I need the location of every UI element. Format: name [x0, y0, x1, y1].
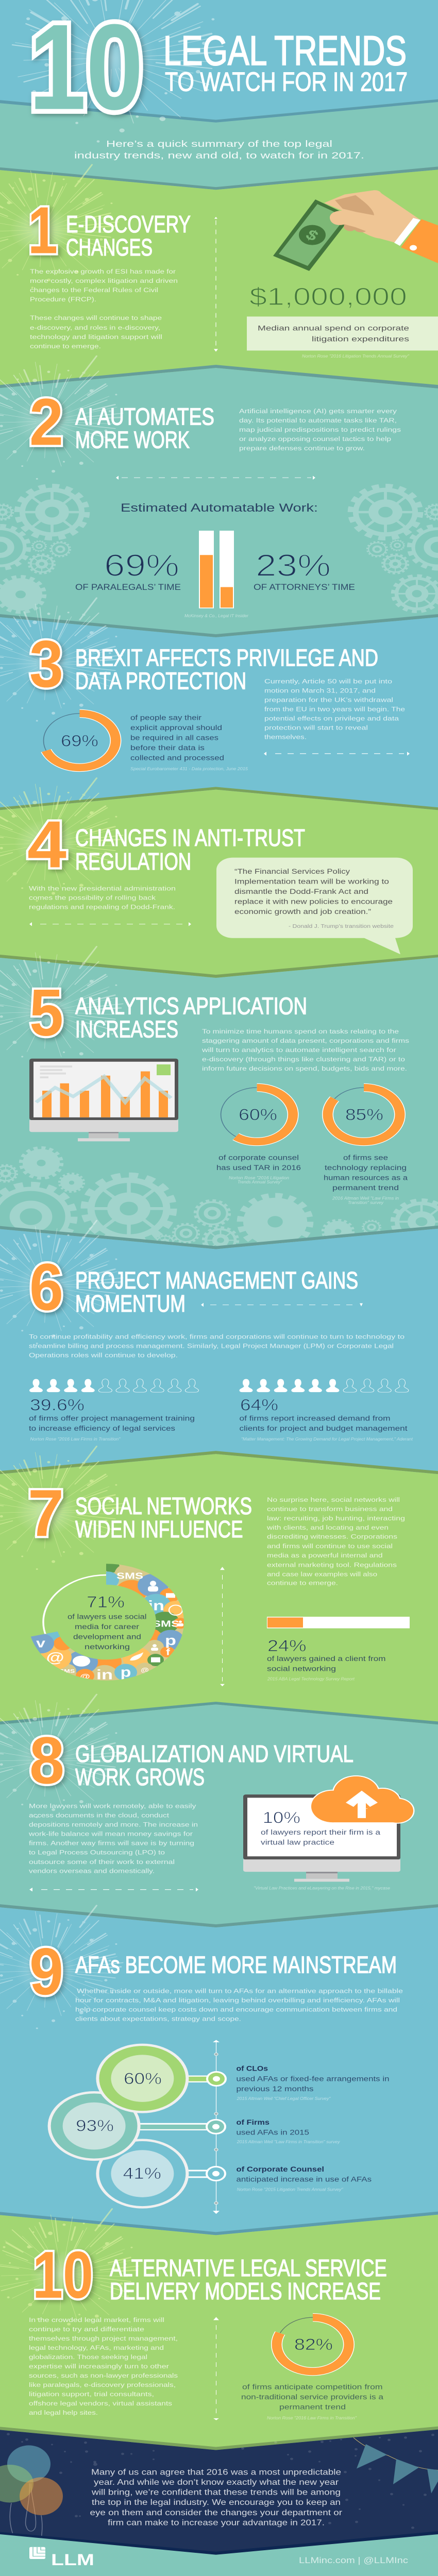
body text: Procedure (FRCP).	[30, 296, 96, 303]
caption	[241, 2383, 384, 2420]
body text: No surprise here, social networks will	[267, 1496, 400, 1503]
panel: footer	[0, 2531, 438, 2576]
arrow: horizontal dashed	[201, 1303, 363, 1307]
gears	[0, 486, 438, 612]
number 5: 5	[29, 975, 63, 1050]
stat: paralegals: 69%	[104, 548, 179, 583]
body text: from the EU in two years will begin. The	[264, 705, 405, 713]
icon: cloud upload	[311, 1776, 413, 1823]
icon: hand holding money: $	[302, 226, 322, 244]
body text: continue to emerge.	[30, 343, 101, 349]
body text: prepare defenses continue to grow.	[239, 445, 365, 452]
donut chart: 60%: 60%	[239, 1105, 277, 1124]
body text: outsource some of their work to external	[29, 1858, 175, 1865]
body text: continue to try and differentiate	[29, 2326, 144, 2333]
caption: corporate counsel: Norton Rose "2016 Litigation	[229, 1176, 289, 1180]
body text: depositions remotely and more. The increase in	[29, 1821, 198, 1828]
body text: help corporate counsel keep costs down and encourage communication between firms and	[75, 2006, 397, 2013]
body text: themselves through project management,	[29, 2335, 178, 2342]
social ring chart: 71%: in	[148, 1598, 164, 1613]
donut chart: 69%: 69%	[61, 732, 98, 750]
timeline	[213, 2040, 220, 2214]
arrow: horizontal dashed	[264, 752, 410, 756]
body text	[29, 1333, 405, 1359]
body text: The explosive growth of ESI has made for	[30, 268, 176, 275]
gears	[0, 1148, 438, 1253]
body text: preparation for the UK’s withdrawal	[264, 696, 393, 703]
social ring chart: 71%: p	[165, 1632, 176, 1648]
number 1: 1	[28, 193, 58, 267]
heading	[75, 1740, 353, 1790]
source: "Virtual Law Practices and eLawyering on the Rise in 2015," mycase	[254, 1886, 390, 1890]
body text: with clients, and locating and even	[266, 1524, 389, 1531]
speech bubble: quote: dismantle the Dodd-Frank Act and	[234, 888, 368, 896]
bubble: 41%	[97, 2140, 225, 2207]
caption: corporate counsel	[216, 1154, 301, 1184]
body text: With the new presidential administration	[29, 885, 176, 892]
label: of CLOs: used AFAs or fixed-fee arrangements in	[236, 2075, 390, 2083]
stat: 39.6%: of firms offer project management training	[29, 1415, 195, 1422]
bubble: 60%: 60%	[124, 2069, 162, 2088]
heading: DATA PROTECTION	[75, 667, 246, 694]
number 9: 9	[29, 1935, 63, 2009]
label: of Corporate Counsel: of Corporate Counsel	[236, 2165, 324, 2173]
label: of Firms: 2015 Altman Weil "Law Firms in Transition" survey	[237, 2140, 341, 2144]
panel: 5 analytics	[0, 946, 438, 1253]
body text: discrediting witnesses. Corporations	[267, 1533, 397, 1540]
icon: hand holding money	[273, 190, 438, 271]
stat text: explicit approval should	[130, 724, 222, 732]
pictogram: 39.6% of firms	[29, 1379, 198, 1392]
body text: Operations roles will continue to develop.	[29, 1352, 178, 1359]
speech bubble: quote: - Donald J. Trump’s transition website	[289, 923, 394, 929]
heading	[75, 644, 378, 694]
arrow: vertical dashed	[213, 2317, 219, 2420]
arrow: vertical dashed	[214, 217, 218, 352]
body text: regulations and repealing of Dodd-Frank.	[29, 903, 175, 910]
social ring chart: 71%: media for career	[75, 1623, 140, 1631]
heading: INCREASES	[75, 1015, 178, 1043]
stat: 24%: social networking	[267, 1665, 336, 1673]
stat: 39.6%: 39.6%	[30, 1396, 85, 1414]
heading: E-DISCOVERY	[66, 210, 191, 238]
social ring chart: 71%: @	[141, 1666, 149, 1673]
body text: potential effects on privilege and data	[264, 715, 399, 722]
body text	[75, 1988, 403, 2022]
body text: To continue profitability and efficiency work, firms and corporations will continue to turn to technology to	[29, 1333, 405, 1340]
callout: median annual spend: litigation expenditures	[312, 335, 409, 343]
caption: firms: Transition" survey	[348, 1200, 384, 1205]
closing text: year. And while we don’t know exactly what the new year	[94, 2478, 339, 2486]
body text: clients about expectations, strategy and scope.	[75, 2015, 241, 2022]
social ring chart: 71%: @	[80, 1672, 90, 1681]
callout: median annual spend: Median annual spend on corporate	[258, 324, 409, 332]
number 7: 7	[28, 1476, 64, 1550]
body text: map judicial predispositions to predict rulings	[239, 426, 401, 433]
panel: intro	[0, 97, 438, 193]
social ring chart: 71%: of lawyers use social	[68, 1613, 146, 1621]
bubble: 93%	[49, 2092, 225, 2160]
pictogram: 64% of firms	[239, 1379, 409, 1392]
social ring chart: 71%: @	[46, 1649, 64, 1665]
bar chart: 24%	[267, 1617, 410, 1629]
stat: 39.6%: Norton Rose "2016 Law Firms in Transition"	[30, 1437, 121, 1442]
speech bubble: quote: economic growth and job creation.”	[234, 908, 371, 916]
label: of CLOs: 2015 Altman Weil "Chief Legal Officer Survey"	[237, 2096, 331, 2100]
bubble: 60%	[97, 2045, 226, 2112]
social ring chart: 71%: f	[166, 1647, 171, 1657]
stat: 24%: 2015 ABA Legal Technology Survey Report	[267, 1677, 355, 1681]
speech bubble: quote	[216, 858, 413, 954]
logo: LLM	[29, 2547, 94, 2569]
label: of Corporate Counsel: anticipated increase in use of AFAs	[236, 2176, 372, 2183]
body text: comes the possibility of rolling back	[29, 894, 156, 901]
heading: CHANGES	[66, 233, 153, 261]
body text: or analyze opposing counsel tactics to help	[239, 435, 391, 443]
stat text	[130, 714, 224, 762]
speech bubble: quote: “The Financial Services Policy	[234, 868, 350, 876]
number 6: 6	[29, 1250, 63, 1324]
label: of CLOs: of CLOs	[236, 2064, 268, 2073]
social ring chart: 71%: in	[96, 1667, 113, 1683]
body text: hour for contracts, M&A and litigation, leaving behind overbilling and inefficiency. AFAs will	[75, 1997, 400, 2004]
stat: $1,000,000: $1,000,000	[249, 283, 407, 310]
confetti dots	[7, 2433, 434, 2529]
stat text: be required in all cases	[130, 734, 218, 742]
heading: WIDEN INFLUENCE	[75, 1516, 243, 1543]
firework: 4	[0, 778, 123, 902]
callout: median annual spend	[247, 316, 438, 350]
heading	[75, 403, 214, 453]
body text: work-life balance will mean money savings for	[28, 1830, 193, 1837]
caption: non-traditional service providers is a	[241, 2393, 384, 2401]
body text: and case law examples will also	[267, 1570, 377, 1578]
body text: and legal help sites.	[29, 2409, 98, 2416]
firework: 2	[0, 356, 123, 480]
intro text	[74, 139, 364, 161]
heading	[110, 2254, 387, 2304]
heading: WORK GROWS	[75, 1763, 205, 1790]
number 4: 4	[27, 807, 66, 882]
caption: of firms anticipate competition from	[242, 2383, 382, 2391]
caption: corporate counsel: has used TAR in 2016	[216, 1164, 301, 1172]
body text	[239, 408, 401, 452]
title	[163, 28, 408, 96]
firework: 5	[0, 946, 123, 1070]
arrow: vertical dashed	[220, 1567, 225, 1686]
body text: staggering amount of data present, corporations and firms	[202, 1037, 409, 1044]
label: of Corporate Counsel	[236, 2165, 372, 2192]
firework: 10	[0, 2209, 139, 2332]
caption: corporate counsel: of corporate counsel	[218, 1154, 299, 1162]
body text: To minimize time humans spend on tasks relating to the	[202, 1028, 399, 1035]
closing text	[90, 2468, 342, 2527]
body text	[264, 677, 405, 740]
heading	[75, 992, 307, 1043]
body text: sources, such as non-lawyer professionals	[29, 2372, 178, 2379]
body text: Whether inside or outside, more will turn to AFAs for an alternative approach to the billable	[77, 1988, 403, 1994]
social ring chart: 71%: development and	[73, 1633, 141, 1641]
logo: LLM: LLM	[51, 2550, 94, 2569]
social ring chart: 71%: p	[121, 1665, 131, 1680]
source: McKinsey & Co., Legal IT Insider	[184, 614, 249, 618]
body text: will turn to analytics to automate intelligent search for	[201, 1046, 396, 1054]
bar chart: automatable work	[199, 531, 234, 608]
intro text: industry trends, new and old, to watch for in 2017.	[74, 150, 364, 161]
panel: 1 e-discovery changes	[0, 165, 438, 391]
caption: firms: human resources as a	[324, 1174, 408, 1182]
social ring chart: 71%: 71%	[87, 1592, 125, 1611]
stat: attorneys: 23%	[256, 548, 331, 583]
speech bubble: quote: replace it with new policies to encourage	[234, 898, 393, 906]
stat: paralegals	[75, 548, 181, 592]
social ring chart: 71%: v	[36, 1636, 45, 1650]
stat: 24%	[267, 1636, 385, 1681]
panel: header	[0, 0, 438, 143]
firework: 6	[0, 1221, 123, 1344]
body text: motion on March 31, 2017, and	[264, 687, 376, 694]
body text: continue to emerge.	[267, 1579, 338, 1586]
body text: external marketing tool. Regulations	[267, 1561, 397, 1568]
number 8: 8	[29, 1723, 64, 1798]
panel: 2 AI automates more work	[0, 356, 438, 641]
stat: 39.6%	[29, 1396, 195, 1442]
label: of CLOs	[236, 2064, 390, 2100]
stat: 24%: 24%	[267, 1636, 307, 1655]
closing text: eye on them and consider the changes your department or	[90, 2508, 342, 2517]
body text	[29, 885, 176, 910]
donut chart: 69%	[43, 714, 115, 768]
label: of CLOs: previous 12 months	[236, 2085, 313, 2093]
intro text: Here’s a quick summary of the top legal	[106, 139, 332, 149]
social ring chart: 71%: SMS	[116, 1571, 143, 1581]
body text: vendors overseas and domestically.	[29, 1867, 155, 1874]
caption: firms	[324, 1154, 408, 1205]
stat: paralegals: OF PARALEGALS’ TIME	[75, 582, 181, 592]
closing text: the top in the legal industry. We encourage you to keep an	[92, 2498, 341, 2506]
body text: and firms will continue to use social	[267, 1543, 393, 1550]
big number 10: 10	[29, 0, 143, 135]
heading: MOMENTUM	[75, 1290, 186, 1317]
stat: 24%: of lawyers gained a client from	[267, 1655, 386, 1663]
stat: attorneys: OF ATTORNEYS’ TIME	[254, 582, 355, 592]
donut chart: 85%	[328, 1088, 400, 1142]
arrow: horizontal dashed	[29, 1888, 198, 1891]
body text: to Legal Process Outsourcing (LPO) to	[29, 1849, 165, 1856]
body text: e-discovery, and roles in e-discovery,	[30, 324, 160, 331]
arrow: horizontal dashed	[116, 476, 315, 480]
closing text: firm can make to increase your advantage in 2017.	[108, 2518, 325, 2527]
caption: Norton Rose "2016 Law Firms in Transition"	[267, 2416, 357, 2420]
stat: 64%: of firms report increased demand from	[239, 1415, 390, 1422]
panel: closing	[0, 2427, 438, 2556]
donut chart: 82%	[277, 2317, 349, 2371]
bubble: 41%: 41%	[123, 2164, 161, 2182]
label: of Corporate Counsel: Norton Rose "2015 Litigation Trends Annual Survey"	[237, 2188, 343, 2192]
body text: globalization. Those seeking legal	[29, 2353, 147, 2361]
social ring chart: 71%	[31, 1564, 184, 1681]
body text: offshore legal vendors, virtual assistants	[29, 2400, 172, 2407]
body text	[201, 1028, 409, 1072]
heading	[75, 1267, 358, 1317]
firework: 7	[0, 1446, 123, 1570]
closing text: Many of us can agree that 2016 was a most unpredictable	[91, 2468, 341, 2477]
stat: 64%: 64%	[240, 1396, 278, 1414]
closing text: will bring, we’re confident that these trends will be among	[91, 2488, 341, 2497]
icon: monitor with cloud: virtual law practice	[261, 1839, 334, 1846]
speech bubble: quote: Implementation team will be working to	[234, 878, 389, 886]
body text: more costly, complex litigation and driven	[30, 277, 178, 284]
panel: 3 brexit	[0, 598, 438, 811]
body text: continue to transform business and	[267, 1505, 393, 1513]
body text: expertise will increasingly turn to other	[29, 2363, 169, 2370]
stat text: of people say their	[130, 714, 202, 722]
heading: REGULATION	[75, 848, 191, 875]
body text: In the crowded legal market, firms will	[29, 2316, 164, 2324]
caption: firms: technology replacing	[325, 1164, 407, 1172]
source: Norton Rose "2016 Litigation Trends Annual Survey"	[302, 354, 410, 359]
stat: 64%	[239, 1396, 413, 1442]
stat text: before their data is	[130, 744, 205, 752]
number 2: 2	[29, 385, 63, 459]
stat text: collected and processed	[130, 754, 224, 762]
caption: firms: of firms see	[343, 1154, 388, 1162]
panel: 6 project management	[0, 1221, 438, 1477]
body text: technology and litigation support will	[30, 333, 162, 340]
body text: inform future decisions on spend, budgets, bids and more.	[202, 1065, 407, 1072]
heading: MORE WORK	[75, 426, 190, 453]
body text: changes to the Federal Rules of Civil	[30, 286, 158, 294]
icon: monitor with cloud: of lawyers report their firm is a	[261, 1828, 381, 1837]
body text: More lawyers will work remotely, able to easily	[29, 1802, 197, 1809]
body text: law: recruiting, job hunting, interacting	[267, 1515, 405, 1522]
body text	[266, 1496, 405, 1586]
body text: Artificial intelligence (AI) gets smarter every	[239, 408, 397, 414]
body text: themselves.	[264, 733, 307, 740]
body text: like paralegals, e-discovery professionals,	[29, 2381, 176, 2388]
heading: SOCIAL NETWORKS	[75, 1493, 252, 1519]
label: of Firms: of Firms	[236, 2118, 269, 2126]
body text: litigation support, trial consultants,	[29, 2391, 154, 2398]
firework: 8	[0, 1694, 123, 1818]
bubble: 93%: 93%	[76, 2116, 114, 2134]
subheading: Estimated Automatable Work:	[121, 501, 318, 514]
body text: e-discovery (through things like clustering and TAR) or to	[202, 1056, 405, 1063]
arrow: horizontal dashed	[29, 922, 191, 926]
social ring chart: 71%: SMS	[153, 1619, 179, 1629]
heading	[66, 210, 191, 261]
body text: firms. Another way firms will save is by turning	[29, 1839, 194, 1846]
icon: monitor with cloud	[243, 1776, 413, 1882]
social ring chart: 71%: SMS	[59, 1668, 75, 1674]
bunting	[353, 2437, 438, 2493]
panel: 9 AFAs	[0, 1904, 438, 2238]
panel: 4 anti-trust	[0, 778, 438, 981]
body text: media as a powerful internal and	[267, 1552, 382, 1559]
firework: 9	[0, 1906, 123, 2029]
firework: header	[12, 0, 223, 143]
donut chart: 82%: 82%	[294, 2335, 333, 2353]
body text	[29, 2316, 178, 2416]
firework: 3	[0, 598, 123, 722]
body text	[30, 268, 178, 349]
heading: AI AUTOMATES	[75, 403, 214, 430]
icon: monitor with chart	[29, 1059, 178, 1141]
number 10: 10	[32, 2238, 93, 2312]
number 3: 3	[29, 627, 63, 701]
donut chart: 85%: 85%	[345, 1105, 383, 1124]
body text: streamline billing and process management. Similarly, Legal Project Manager (LPM) or Corporate Legal	[29, 1343, 394, 1349]
stat: 39.6%: to increase efficiency of legal services	[29, 1425, 175, 1433]
source: Special Eurobarometer 431 - Data protection, June 2015	[130, 767, 248, 771]
balloons	[0, 2445, 63, 2538]
firework: 1	[0, 165, 119, 289]
caption: permanent trend	[279, 2403, 346, 2411]
heading	[75, 1493, 252, 1543]
caption: firms: 2016 Altman Weil "Law Firms in	[332, 1196, 399, 1200]
caption: firms: permanent trend	[332, 1184, 399, 1192]
body text: legal technology, AFAs, marketing and	[29, 2344, 164, 2351]
body text: Currently, Article 50 will be put into	[264, 677, 392, 685]
social ring chart: 71%: networking	[85, 1643, 130, 1651]
body text: protection will start to reveal	[264, 724, 368, 731]
body text: access documents in the cloud, conduct	[29, 1811, 169, 1819]
heading	[75, 824, 305, 875]
label: of Firms	[236, 2118, 341, 2144]
panel: 7 social networks	[0, 1446, 438, 1727]
footer links: LLMinc.com | @LLMInc	[299, 2556, 408, 2565]
body text: day. Its potential to automate tasks like TAR,	[239, 417, 397, 424]
icon: monitor with cloud: 10%	[263, 1808, 300, 1826]
panel: 8 globalization	[0, 1694, 438, 1928]
stat: attorneys	[254, 548, 355, 592]
body text	[28, 1802, 198, 1874]
body text: These changes will continue to shape	[30, 314, 162, 321]
caption: corporate counsel: Trends Annual Survey"	[238, 1180, 282, 1184]
panel: 10 alternative legal service	[0, 2209, 438, 2452]
stat: 64%: clients for project and budget management	[239, 1425, 408, 1433]
label: of Firms: used AFAs in 2015	[236, 2128, 309, 2137]
donut chart: 60%	[221, 1088, 293, 1142]
